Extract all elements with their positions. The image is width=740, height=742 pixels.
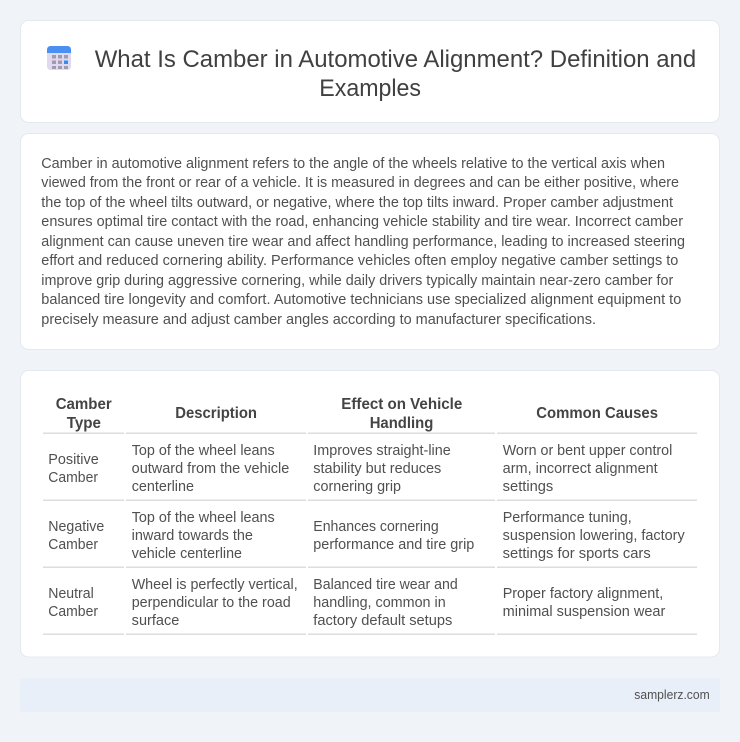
text block: camber explanation: improve grip during aggressive cornering, while daily drivers typically maintain near-zero camber for [41, 273, 673, 289]
table header row: Type [67, 415, 101, 432]
table header row: Effect on Vehicle [341, 396, 463, 413]
table header row: Description [175, 405, 257, 422]
table header row: Camber [56, 396, 112, 413]
table row: negative camber: inward towards the [132, 528, 253, 544]
table row: negative camber: suspension lowering, factory [503, 528, 686, 544]
table row: neutral camber: minimal suspension wear [503, 604, 665, 620]
footer bar [20, 678, 720, 712]
footer bar: samplerz.com [634, 688, 710, 702]
table row: neutral camber: Balanced tire wear and [313, 577, 458, 593]
table row: negative camber [43, 510, 697, 568]
table row: neutral camber: surface [132, 613, 179, 629]
panel: definition text [20, 134, 720, 350]
table row: positive camber: Improves straight-line [313, 443, 451, 459]
table row: neutral camber: Neutral [48, 586, 94, 602]
table row: positive camber: stability but reduces [313, 461, 441, 477]
table row: neutral camber: handling, common in [313, 595, 446, 611]
table row: positive camber: outward from the vehicle [132, 461, 289, 477]
table header row [43, 396, 697, 434]
text block: camber explanation [41, 156, 685, 328]
text block: camber explanation: ensures optimal tire contact with the road, enhancing vehicle stability and tire wear. Incorrect camber [41, 214, 683, 230]
table row: negative camber: Top of the wheel leans [132, 510, 275, 526]
icon: calendar [47, 46, 71, 70]
table row: positive camber: Top of the wheel leans [132, 443, 275, 459]
text block: camber explanation: the top of the wheel tilts outward, or negative, where the top tilts inward. Proper camber adjustment [41, 195, 673, 211]
table header row: Handling [370, 415, 433, 432]
table row: positive camber [43, 443, 697, 501]
table row: neutral camber: factory default setups [313, 613, 452, 629]
table row: negative camber: Camber [48, 537, 98, 553]
table row: neutral camber: Proper factory alignment, [503, 586, 663, 602]
table row: positive camber: settings [503, 479, 553, 495]
table row: neutral camber: perpendicular to the road [132, 595, 291, 611]
table row: neutral camber: Wheel is perfectly vertical, [132, 577, 298, 593]
title: Examples [319, 75, 421, 102]
table row: neutral camber [43, 577, 697, 635]
table row: positive camber: Camber [48, 470, 98, 486]
text block: camber explanation: precisely measure and adjust camber angles according to manufacturer specifications. [41, 312, 596, 328]
panel: title header [20, 20, 720, 122]
table row: negative camber: performance and tire grip [313, 537, 474, 553]
table row: negative camber: Enhances cornering [313, 519, 439, 535]
table row: positive camber: cornering grip [313, 479, 401, 495]
table header row: Common Causes [536, 405, 658, 422]
table row: positive camber: arm, incorrect alignment [503, 461, 658, 477]
table row: positive camber: Worn or bent upper control [503, 443, 672, 459]
table row: negative camber: Performance tuning, [503, 510, 632, 526]
title [95, 46, 696, 102]
panel: camber table [20, 370, 720, 657]
table row: negative camber: Negative [48, 519, 104, 535]
table row: negative camber: settings for sports cars [503, 546, 651, 562]
text block: camber explanation: Camber in automotive alignment refers to the angle of the wheels relative to the vertical axis when [41, 156, 665, 172]
table row: negative camber: vehicle centerline [132, 546, 242, 562]
text block: camber explanation: alignment can cause uneven tire wear and affect handling performance, leading to increased steering [41, 234, 685, 250]
table row: positive camber: centerline [132, 479, 194, 495]
text block: camber explanation: viewed from the front or rear of a vehicle. It is measured in degrees and can be either positive, where [41, 175, 679, 191]
title: What Is Camber in Automotive Alignment? Definition and [95, 46, 696, 73]
table row: neutral camber: Camber [48, 604, 98, 620]
text block: camber explanation: balanced tire longevity and comfort. Automotive technicians use specialized alignment equipment to [41, 292, 681, 308]
table row: positive camber: Positive [48, 452, 99, 468]
text block: camber explanation: effort and reduced cornering ability. Performance vehicles often employ negative camber settings to [41, 253, 678, 269]
